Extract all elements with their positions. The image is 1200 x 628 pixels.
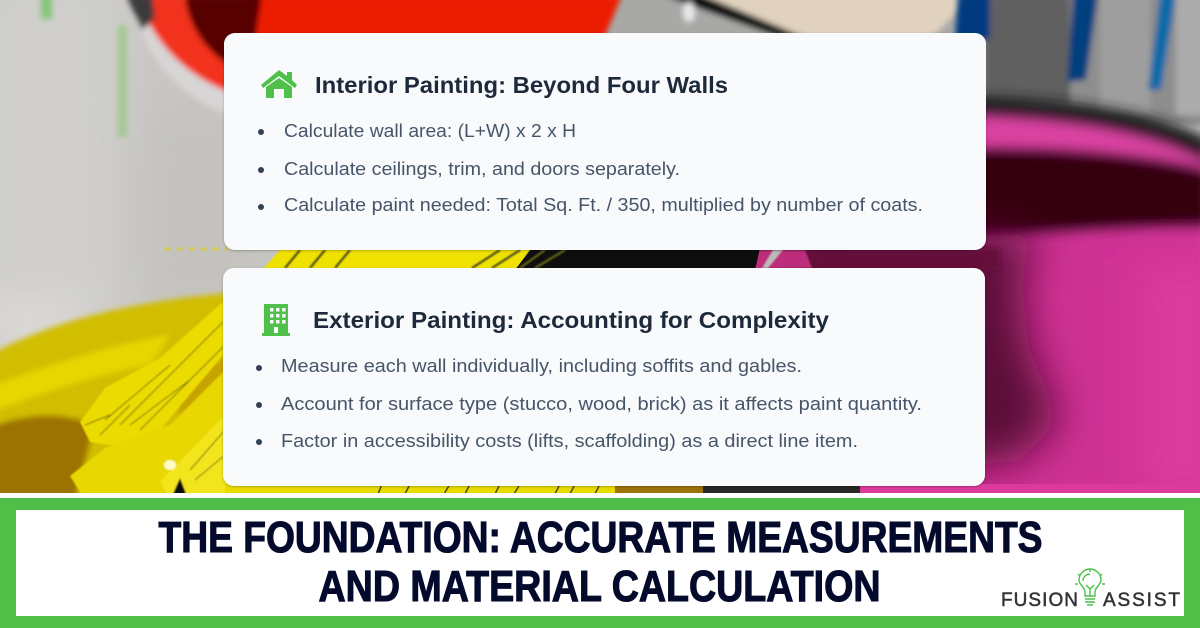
panel background — [223, 268, 985, 486]
background photo: paint cans — [0, 0, 1200, 500]
logo: Fusion Assist: FUSION — [1001, 590, 1078, 611]
bullet list: interior painting: Calculate ceilings, trim, and doors separately. — [284, 159, 680, 179]
logo: Fusion Assist — [1001, 569, 1180, 611]
banner frame — [0, 498, 1200, 628]
title — [158, 513, 1042, 611]
heading: exterior painting: Exterior Painting: Accounting for Complexity — [313, 307, 829, 333]
yellow paint can — [0, 292, 240, 500]
green drips — [41, 0, 127, 137]
gap strip details between panels — [785, 248, 1000, 270]
bullet list: exterior painting: Measure each wall individually, including soffits and gables. — [281, 356, 802, 376]
bullet list: exterior painting: Factor in accessibility costs (lifts, scaffolding) as a direct line item. — [281, 431, 858, 451]
bottom strip under panel — [225, 484, 615, 494]
title: AND MATERIAL CALCULATION — [318, 562, 880, 611]
grey, black and beige object, top centre — [602, 0, 959, 33]
title: THE FOUNDATION: ACCURATE MEASUREMENTS — [158, 513, 1042, 562]
bullet list: interior painting: Calculate wall area: (L+W) x 2 x H — [284, 121, 576, 141]
panel background — [224, 33, 986, 250]
bullet list: interior painting — [258, 121, 923, 215]
heading: interior painting: Interior Painting: Beyond Four Walls — [315, 72, 728, 98]
icon: house — [261, 70, 297, 98]
bullet list: interior painting: Calculate paint needed: Total Sq. Ft. / 350, multiplied by number of coats. — [284, 195, 923, 215]
panel: interior painting — [224, 33, 986, 250]
drips of yellow — [165, 248, 228, 250]
grey background with blue stripes, top right — [955, 0, 1200, 125]
bullet list: exterior painting — [256, 356, 922, 451]
icon: light bulb — [1075, 569, 1105, 605]
logo: Fusion Assist: ASSIST — [1103, 590, 1180, 611]
icon: building — [262, 304, 290, 336]
grey paint can, left — [0, 0, 107, 347]
title banner — [0, 498, 1200, 628]
dark shadow in magenta paint — [780, 235, 1200, 500]
bullet list: exterior painting: Account for surface type (stucco, wood, brick) as it affects paint quantity. — [281, 394, 922, 414]
panel: exterior painting — [223, 268, 985, 486]
magenta paint can, right — [756, 88, 1200, 484]
red paint can — [126, 0, 640, 118]
yellow brushes — [70, 302, 228, 493]
